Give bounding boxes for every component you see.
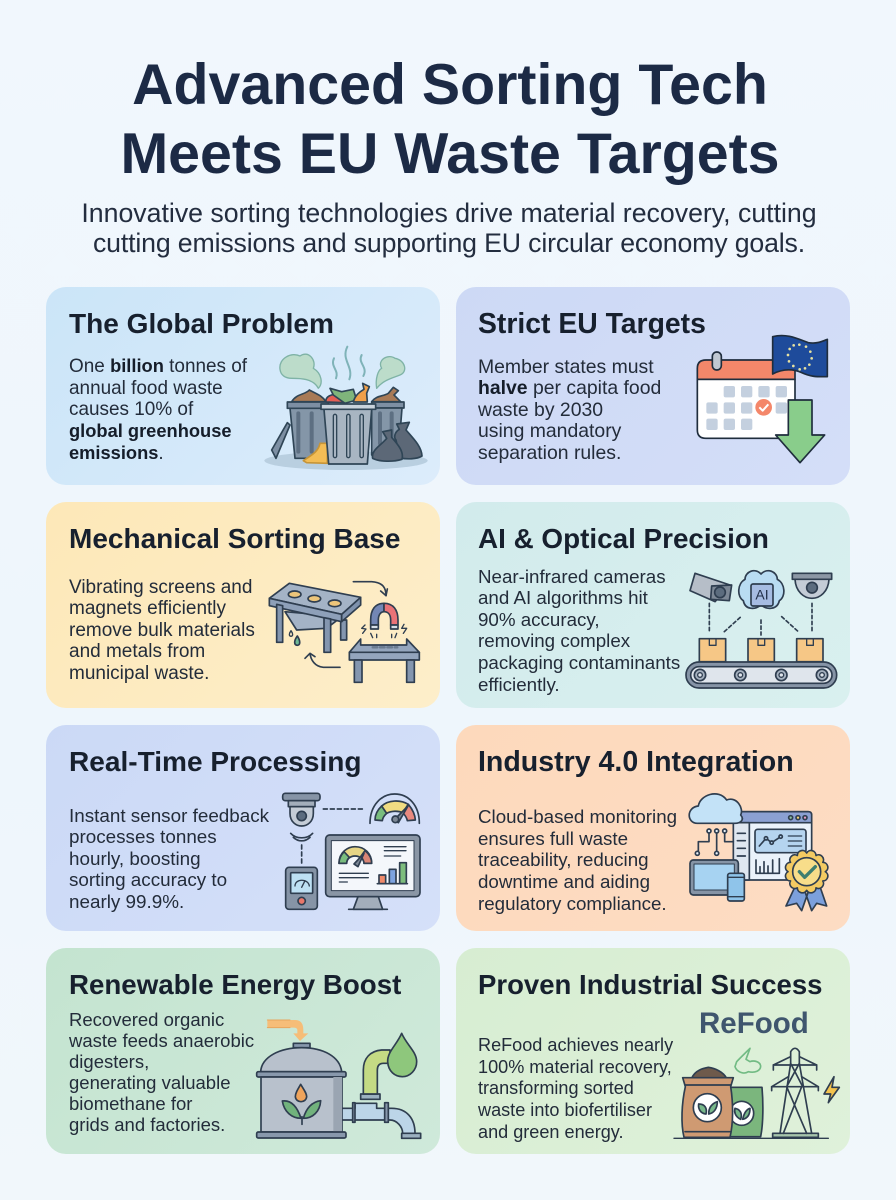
text block: causes 10% of [69,399,193,420]
text block: remove bulk materials [69,620,255,641]
text block: ensures full waste [478,828,628,849]
text block: processes tonnes [69,826,217,847]
panel: Mechanical Sorting Base [46,502,440,708]
icon: calendar, EU flag and down arrow [696,334,828,464]
text block: removing complex [478,630,630,651]
icon: cameras, AI chip and conveyor: AI [755,586,769,602]
text block: magnets efficiently [69,598,226,619]
icon: vibrating screen and magnet [268,580,420,684]
panel: Industry 4.0 Integration [456,725,850,931]
text block: municipal waste. [69,663,209,684]
text block: Vibrating screens and [69,576,252,598]
text block: generating valuable [69,1072,230,1093]
text block: downtime and aiding [478,871,650,892]
text block: Near-infrared cameras [478,566,666,586]
icon: sensor, gauge and dashboard [282,792,421,910]
icon: cloud dashboard and badge [688,793,829,912]
heading: AI & Optical Precision [478,523,769,554]
text block: Member states must [478,356,654,378]
icon: fertiliser bags and pylon [673,1048,840,1139]
title: Advanced Sorting Tech [132,53,768,117]
panel: Proven Industrial Success [456,948,850,1154]
panel: Real-Time Processing [46,725,440,931]
panel: The Global Problem [46,287,440,485]
text block: grids and factories. [69,1114,225,1135]
subtitle: Innovative sorting technologies drive material recovery, cutting [81,198,817,228]
text block: traceability, reducing [478,849,649,870]
heading: The Global Problem [69,308,334,339]
logo: ReFood: ReFood [699,1007,809,1040]
heading: Renewable Energy Boost [69,969,401,1000]
heading: Strict EU Targets [478,308,706,340]
text block [69,355,248,464]
subtitle [81,198,817,258]
text block: Instant sensor feedback [69,804,269,826]
text block: ReFood achieves nearly [478,1035,673,1055]
text block: sorting accuracy to [69,869,227,890]
text block: separation rules. [478,442,621,464]
icon: digester tank and biomethane drop [256,1020,422,1140]
heading: Proven Industrial Success [478,969,822,1000]
text block: halve per capita food [478,377,661,399]
text block: efficiently. [478,674,560,695]
text block [478,1035,674,1142]
text block: 100% material recovery, [478,1057,672,1077]
text block [478,806,677,914]
text block: global greenhouse [69,420,232,441]
text block: and green energy. [478,1122,624,1142]
text block: hourly, boosting [69,848,201,869]
panel: Renewable Energy Boost [46,948,440,1154]
text block: transforming sorted [478,1078,634,1098]
title [120,53,780,186]
title: Meets EU Waste Targets [120,122,780,186]
text block: and metals from [69,641,205,662]
icon: cameras, AI chip and conveyor [685,570,838,689]
text block: Cloud-based monitoring [478,806,677,827]
icon: overflowing waste bins [264,346,428,470]
text block: regulatory compliance. [478,893,667,914]
text block: annual food waste [69,378,223,399]
text block: waste into biofertiliser [478,1100,652,1120]
text block [69,804,269,912]
text block [478,356,661,464]
text block: nearly 99.9%. [69,891,184,912]
text block: waste feeds anaerobic [69,1030,254,1051]
text block: using mandatory [478,420,621,442]
text block [69,576,255,684]
panel: Strict EU Targets [456,287,850,485]
heading: Real-Time Processing [69,746,362,777]
text block: packaging contaminants [478,652,680,673]
text block: 90% accuracy, [478,609,600,630]
text block: Recovered organic [69,1009,224,1030]
heading: Mechanical Sorting Base [69,523,400,554]
text block: digesters, [69,1051,149,1072]
text block: One billion tonnes of [69,355,247,377]
heading: Industry 4.0 Integration [478,746,794,778]
text block [69,1009,254,1135]
subtitle: cutting emissions and supporting EU circular economy goals. [93,228,805,258]
text block: biomethane for [69,1093,192,1114]
text block: waste by 2030 [478,399,603,421]
panel: AI & Optical Precision [456,502,850,708]
text block: emissions. [69,442,164,464]
text block: and AI algorithms hit [478,587,648,608]
text block [478,566,680,695]
